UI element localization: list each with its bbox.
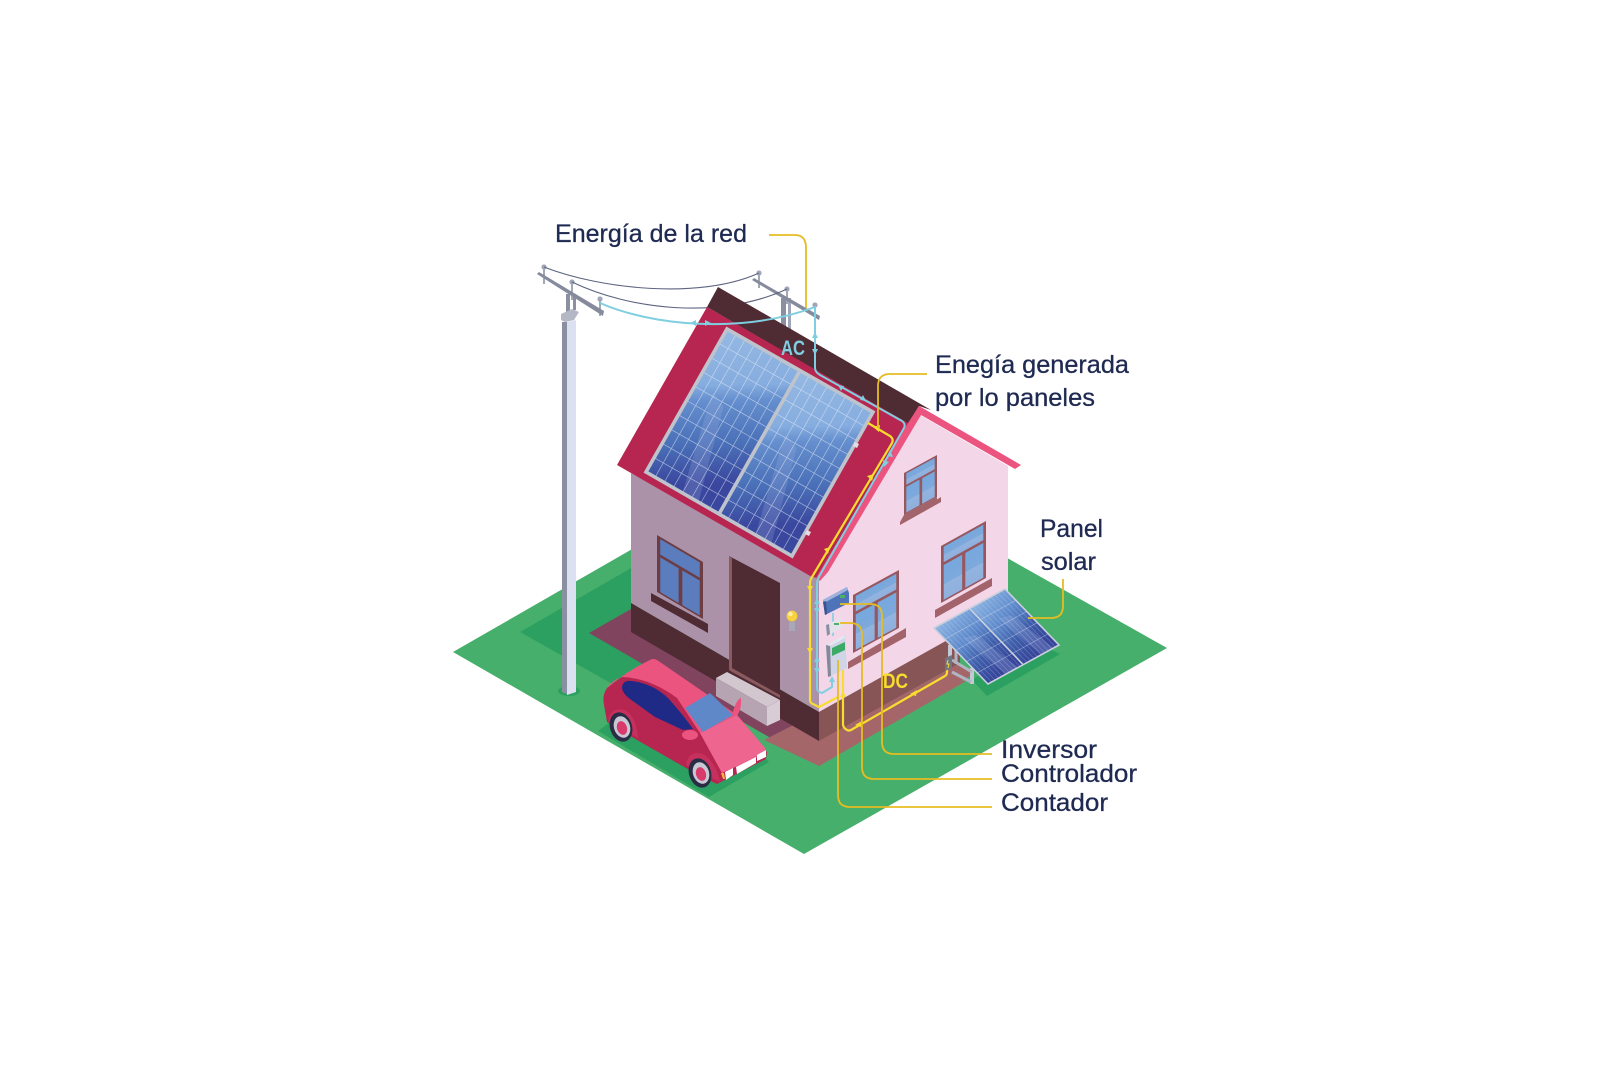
house lilac left wall [631,473,819,712]
roof solar array [646,329,873,556]
car body [603,659,767,784]
left window [651,535,708,633]
label: Controlador: Controlador [1001,760,1137,788]
label: Inversor: Inversor [1001,736,1097,764]
label: Enegía generada por lo paneles: Enegía generada [935,351,1129,379]
ground panel frame [934,589,1059,684]
front wheel arch [686,753,720,782]
ground lawn [453,447,1167,854]
roof panel left [646,329,800,514]
icon: light bulb [787,611,797,631]
leader: solar panel [1028,579,1063,618]
ground solar panel [934,589,1059,684]
controller device [826,617,843,636]
AC blue wiring [600,303,905,693]
utility pole left [537,264,604,696]
car roof and hood [607,659,765,773]
leader: grid energy [769,235,806,308]
AC wire arrows [690,320,893,682]
car side window [622,681,693,730]
house ground shadow [589,609,968,766]
DC yellow wiring [810,423,947,730]
inverter device [823,587,849,615]
car windshield [685,693,733,732]
roof ridge [707,287,931,424]
leader: meter [838,660,992,807]
roof panel frame [646,329,873,556]
ground panel right [970,589,1059,664]
house left foundation [631,603,819,741]
label: Contador: Contador [1001,789,1108,817]
DC wire arrows [807,425,917,727]
label: Enegía generada por lo paneles: por lo paneles [935,384,1095,412]
leader: inverter [840,604,992,754]
car shadow on lawn [598,700,769,797]
meter device [826,635,847,677]
car [603,659,767,791]
front wheel [685,755,715,791]
label: Panel solar: solar [1041,548,1096,576]
car hood front [700,715,765,773]
rear wheel [606,709,636,745]
DC label: DC [883,670,908,693]
car headlights [721,750,766,780]
right wall large window [935,521,992,618]
rear wheel arch [608,709,638,738]
door step [716,672,780,726]
pink eave [816,406,1021,581]
label: Panel solar: Panel [1040,515,1103,543]
right wall lower window [848,570,906,669]
ground panel shadow [972,640,1060,696]
right ground shadow strip [819,663,972,766]
door [729,556,780,698]
utility pole right [752,270,820,332]
AC label: AC [781,337,805,360]
ground panel stand [945,645,972,684]
right wall upper window [900,455,941,525]
house pink right wall [819,415,1008,712]
roof panel right [719,370,873,555]
label: Energía de la red: Energía de la red [555,220,747,248]
leader: panel energy [878,374,927,428]
roof slope [617,307,915,578]
house right foundation [819,633,960,741]
grid wires [544,267,787,308]
car mirrors [682,698,741,740]
leader: controller [840,623,992,779]
darker path on lawn [520,563,730,700]
ground panel left [934,608,1024,684]
